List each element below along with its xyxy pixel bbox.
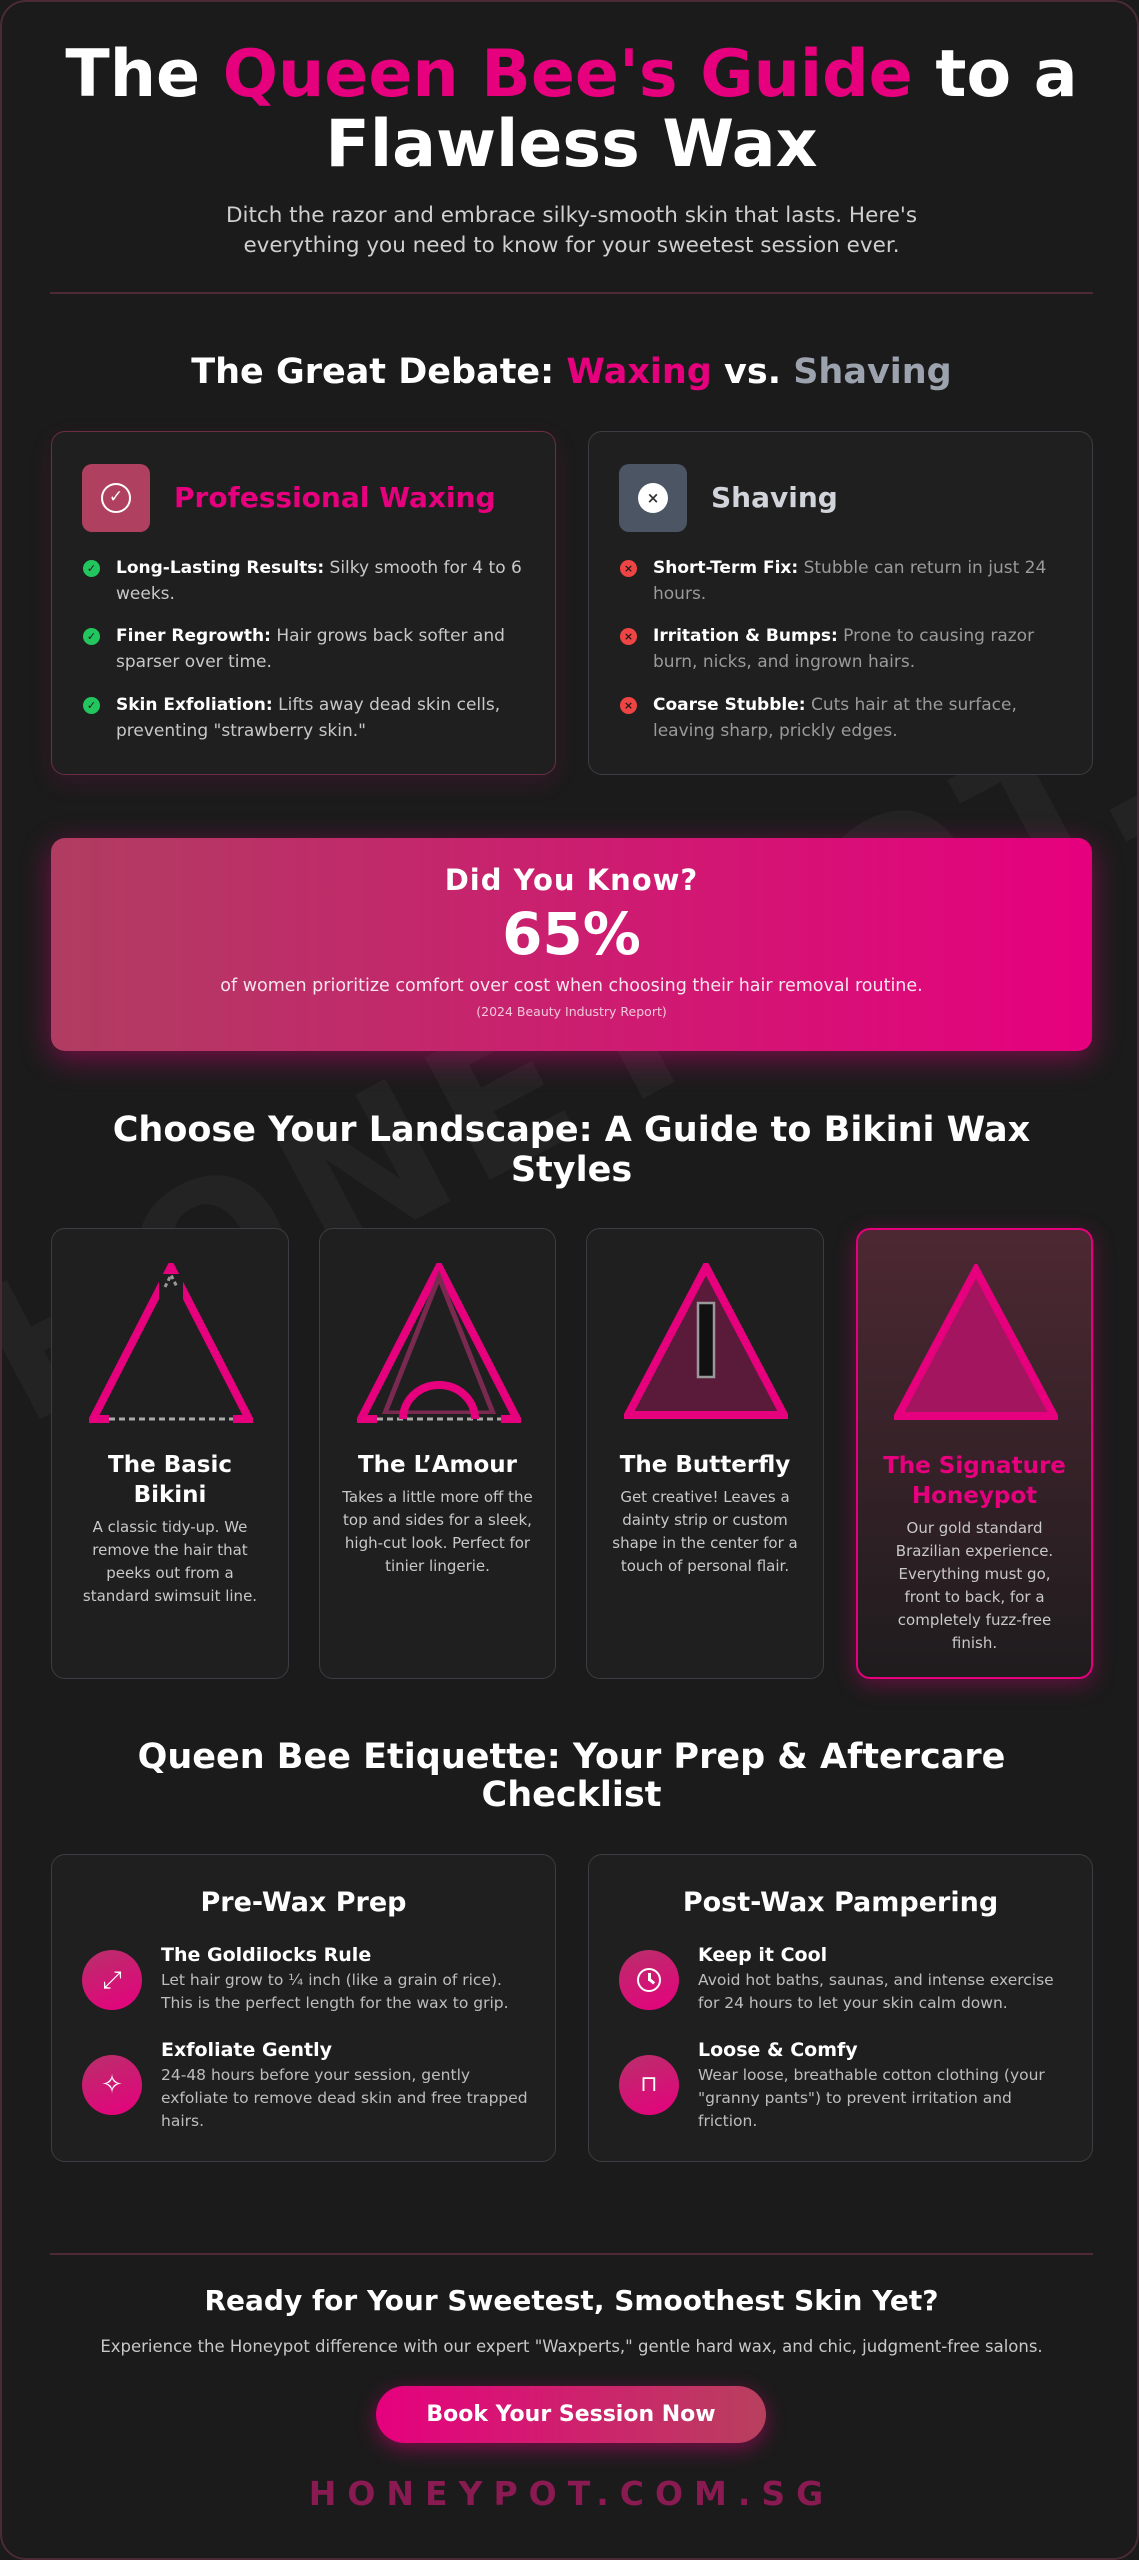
card: signature honeypot [856,1228,1093,1679]
card: basic bikini: The Basic [108,1452,232,1478]
icon: expand arrows [82,1950,142,2010]
panel: shaving: × [624,630,633,643]
icon: filled triangle [894,1264,1058,1420]
icon: triangle outline [89,1263,253,1423]
card: signature honeypot: The Signature [883,1453,1066,1479]
panel: shaving: × [624,562,633,575]
callout: did you know: Did You Know? [445,863,698,897]
icon: sparkles: ✧ [101,2070,123,2100]
panel: shaving [588,431,1093,775]
icon: triangle with arch [357,1263,521,1423]
panel: pre-wax prep: 24-48 hours before your session, gently exfoliate to remove dead skin and free trapped hairs. [161,2066,528,2130]
icon: clock [619,1950,679,2010]
button: book session [376,2386,766,2443]
panel: professional waxing: ✓ [87,699,96,712]
list: shaving drawbacks: Irritation & Bumps: Prone to causing razor burn, nicks, and ingrown hairs. [653,626,1034,672]
card: l'amour: The L’Amour [358,1452,517,1478]
panel title: Shaving [711,481,838,514]
callout: did you know [51,838,1092,1051]
heading: great debate: The Great Debate: Waxing vs. Shaving [191,352,952,392]
list: shaving drawbacks [620,558,1046,741]
list: waxing benefits [83,558,522,741]
card: basic bikini: Bikini [134,1482,206,1508]
panel: pre-wax prep: Pre-Wax Prep [200,1887,406,1918]
card: basic bikini [51,1228,289,1679]
icon: x badge: × [647,489,659,507]
footer brand: HONEYPOT.COM.SG [309,2474,834,2513]
panel: professional waxing [51,431,556,775]
list: waxing benefits: Skin Exfoliation: Lifts away dead skin cells, preventing "strawberry skin." [116,695,500,741]
subtitle: Ditch the razor and embrace silky-smooth skin that lasts. Here's everything you need to know for your sweetest session ever. [226,203,917,258]
cta heading: Ready for Your Sweetest, Smoothest Skin Yet? [204,2284,939,2317]
list: waxing benefits: Long-Lasting Results: Silky smooth for 4 to 6 weeks. [116,558,522,604]
list: shaving drawbacks: Coarse Stubble: Cuts hair at the surface, leaving sharp, prickly edges. [653,695,1017,741]
panel: post-wax pampering: Wear loose, breathable cotton clothing (your "granny pants") to prevent irritation and friction. [698,2066,1045,2130]
card: basic bikini: A classic tidy-up. We remove the hair that peeks out from a standard swimsuit line. [83,1518,257,1605]
panel: post-wax pampering: Keep it Cool [698,1944,827,1966]
icon: x badge [619,464,687,532]
title [65,37,1078,182]
card: l'amour [319,1228,556,1679]
panel title: Professional Waxing [174,481,496,514]
callout: did you know: of women prioritize comfort over cost when choosing their hair removal routine. [220,976,923,996]
icon: check badge [82,464,150,532]
panel: pre-wax prep [51,1854,556,2162]
icon: pants: ⊓ [640,2072,658,2097]
list: shaving drawbacks: Short-Term Fix: Stubble can return in just 24 hours. [653,558,1046,604]
panel: pre-wax prep: Let hair grow to ¼ inch (like a grain of rice). This is the perfect length for the wax to grip. [161,1971,509,2012]
panel: professional waxing: ✓ [87,630,96,643]
card: butterfly: Get creative! Leaves a dainty strip or custom shape in the center for a touch of personal flair. [612,1488,798,1575]
panel: professional waxing: ✓ [87,562,96,575]
callout: did you know: (2024 Beauty Industry Report) [476,1004,667,1019]
heading: bikini styles: Choose Your Landscape: A Guide to Bikini Wax Styles [113,1110,1030,1190]
button: book session: Book Your Session Now [426,2402,716,2427]
icon: check badge: ✓ [109,487,123,507]
panel: pre-wax prep: The Goldilocks Rule [161,1944,371,1966]
panel: post-wax pampering: Loose & Comfy [698,2039,858,2061]
icon: sparkles [82,2055,142,2115]
list: waxing benefits: Finer Regrowth: Hair grows back softer and sparser over time. [116,626,505,672]
panel: pre-wax prep: Exfoliate Gently [161,2039,332,2061]
icon: pants [619,2055,679,2115]
card: signature honeypot: Our gold standard Brazilian experience. Everything must go, front to back, for a completely fuzz-free finish. [896,1519,1053,1652]
panel: post-wax pampering: Post-Wax Pampering [683,1887,998,1918]
icon: expand arrows: ⤢ [102,1966,122,1994]
cta text: Experience the Honeypot difference with our expert "Waxperts," gentle hard wax, and chic, judgment-free salons. [100,2337,1043,2356]
panel: post-wax pampering: Avoid hot baths, saunas, and intense exercise for 24 hours to let your skin calm down. [698,1971,1054,2012]
heading: etiquette: Queen Bee Etiquette: Your Prep & Aftercare Checklist [138,1737,1005,1815]
card: butterfly [586,1228,824,1679]
callout: did you know: 65% [502,900,641,968]
card: butterfly: The Butterfly [620,1452,790,1478]
panel: shaving: × [624,699,633,712]
title: The Queen Bee's Guide to a [65,37,1078,112]
card: signature honeypot: Honeypot [912,1483,1037,1509]
title: Flawless Wax [325,107,818,182]
panel: post-wax pampering [588,1854,1093,2162]
icon: triangle with strip [624,1263,788,1419]
card: l'amour: Takes a little more off the top and sides for a sleek, high-cut look. Perfect for tinier lingerie. [342,1488,533,1575]
